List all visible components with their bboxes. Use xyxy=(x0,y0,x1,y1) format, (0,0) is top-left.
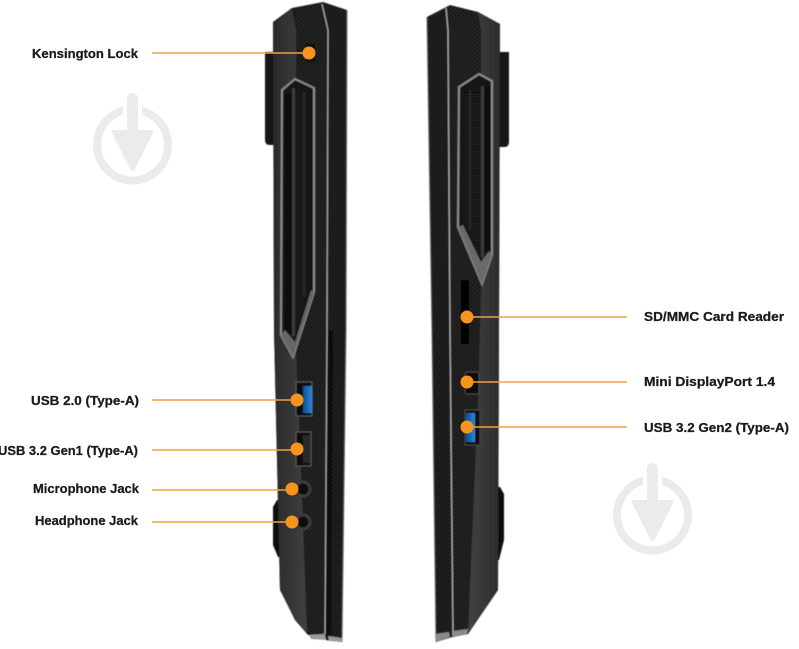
port: Kensington lock xyxy=(306,44,315,62)
callout: USB 2.0 xyxy=(31,393,304,408)
port: USB 2.0 xyxy=(296,382,312,416)
panel: left lighter side xyxy=(273,9,307,633)
laptop: right side view xyxy=(427,5,509,642)
watermark: top left xyxy=(97,90,168,180)
divider: left silver line xyxy=(322,4,328,634)
panel: left rear strip xyxy=(326,8,347,642)
port: USB 3.2 Gen1 xyxy=(296,432,311,466)
panel: right centre textured xyxy=(448,6,480,637)
vent: left xyxy=(281,79,314,357)
callout: Headphone Jack: Headphone Jack xyxy=(35,513,139,528)
hinge bump: right upper xyxy=(498,52,509,147)
callout: Kensington Lock: Kensington Lock xyxy=(32,46,139,61)
port: SD card reader xyxy=(461,280,469,344)
callout: Mini DisplayPort 1.4 xyxy=(460,374,776,389)
callout: Kensington Lock xyxy=(32,46,316,61)
seam: left rear strip dark edge xyxy=(326,330,333,640)
hinge bump: left upper xyxy=(265,52,275,145)
divider: right silver line xyxy=(446,8,453,636)
hinge bump: left lower xyxy=(273,500,282,557)
chassis: left silhouette xyxy=(273,2,347,642)
watermark: bottom right xyxy=(617,460,688,550)
laptop: left side view xyxy=(265,2,347,642)
port: headphone jack xyxy=(294,514,312,530)
callout: Mini DisplayPort 1.4: Mini DisplayPort 1.4 xyxy=(644,374,776,389)
callout: USB 2.0: USB 2.0 (Type-A) xyxy=(31,393,139,408)
callout: Headphone Jack xyxy=(35,513,298,528)
callout: SD/MMC Card Reader: SD/MMC Card Reader xyxy=(644,309,784,324)
callout: Microphone Jack: Microphone Jack xyxy=(33,481,140,496)
callout: SD/MMC Card Reader xyxy=(460,309,784,324)
callout: USB 3.2 Gen1: USB 3.2 Gen1 (Type-A) xyxy=(0,443,138,458)
callout: Microphone Jack xyxy=(33,481,298,496)
hinge bump: right lower xyxy=(497,487,504,560)
chassis: right silhouette xyxy=(427,5,500,642)
panel: right rear strip xyxy=(427,8,452,642)
panel: right lighter side xyxy=(468,12,500,634)
panel: left centre textured xyxy=(296,4,327,635)
callout: USB 3.2 Gen2 xyxy=(460,420,789,435)
port: microphone jack xyxy=(294,480,312,498)
callout: USB 3.2 Gen2: USB 3.2 Gen2 (Type-A) xyxy=(644,420,789,435)
vent: right xyxy=(458,74,492,284)
port: USB 3.2 Gen2 xyxy=(465,410,480,445)
port: Mini DisplayPort xyxy=(465,372,479,394)
callout: USB 3.2 Gen1 xyxy=(0,442,304,458)
